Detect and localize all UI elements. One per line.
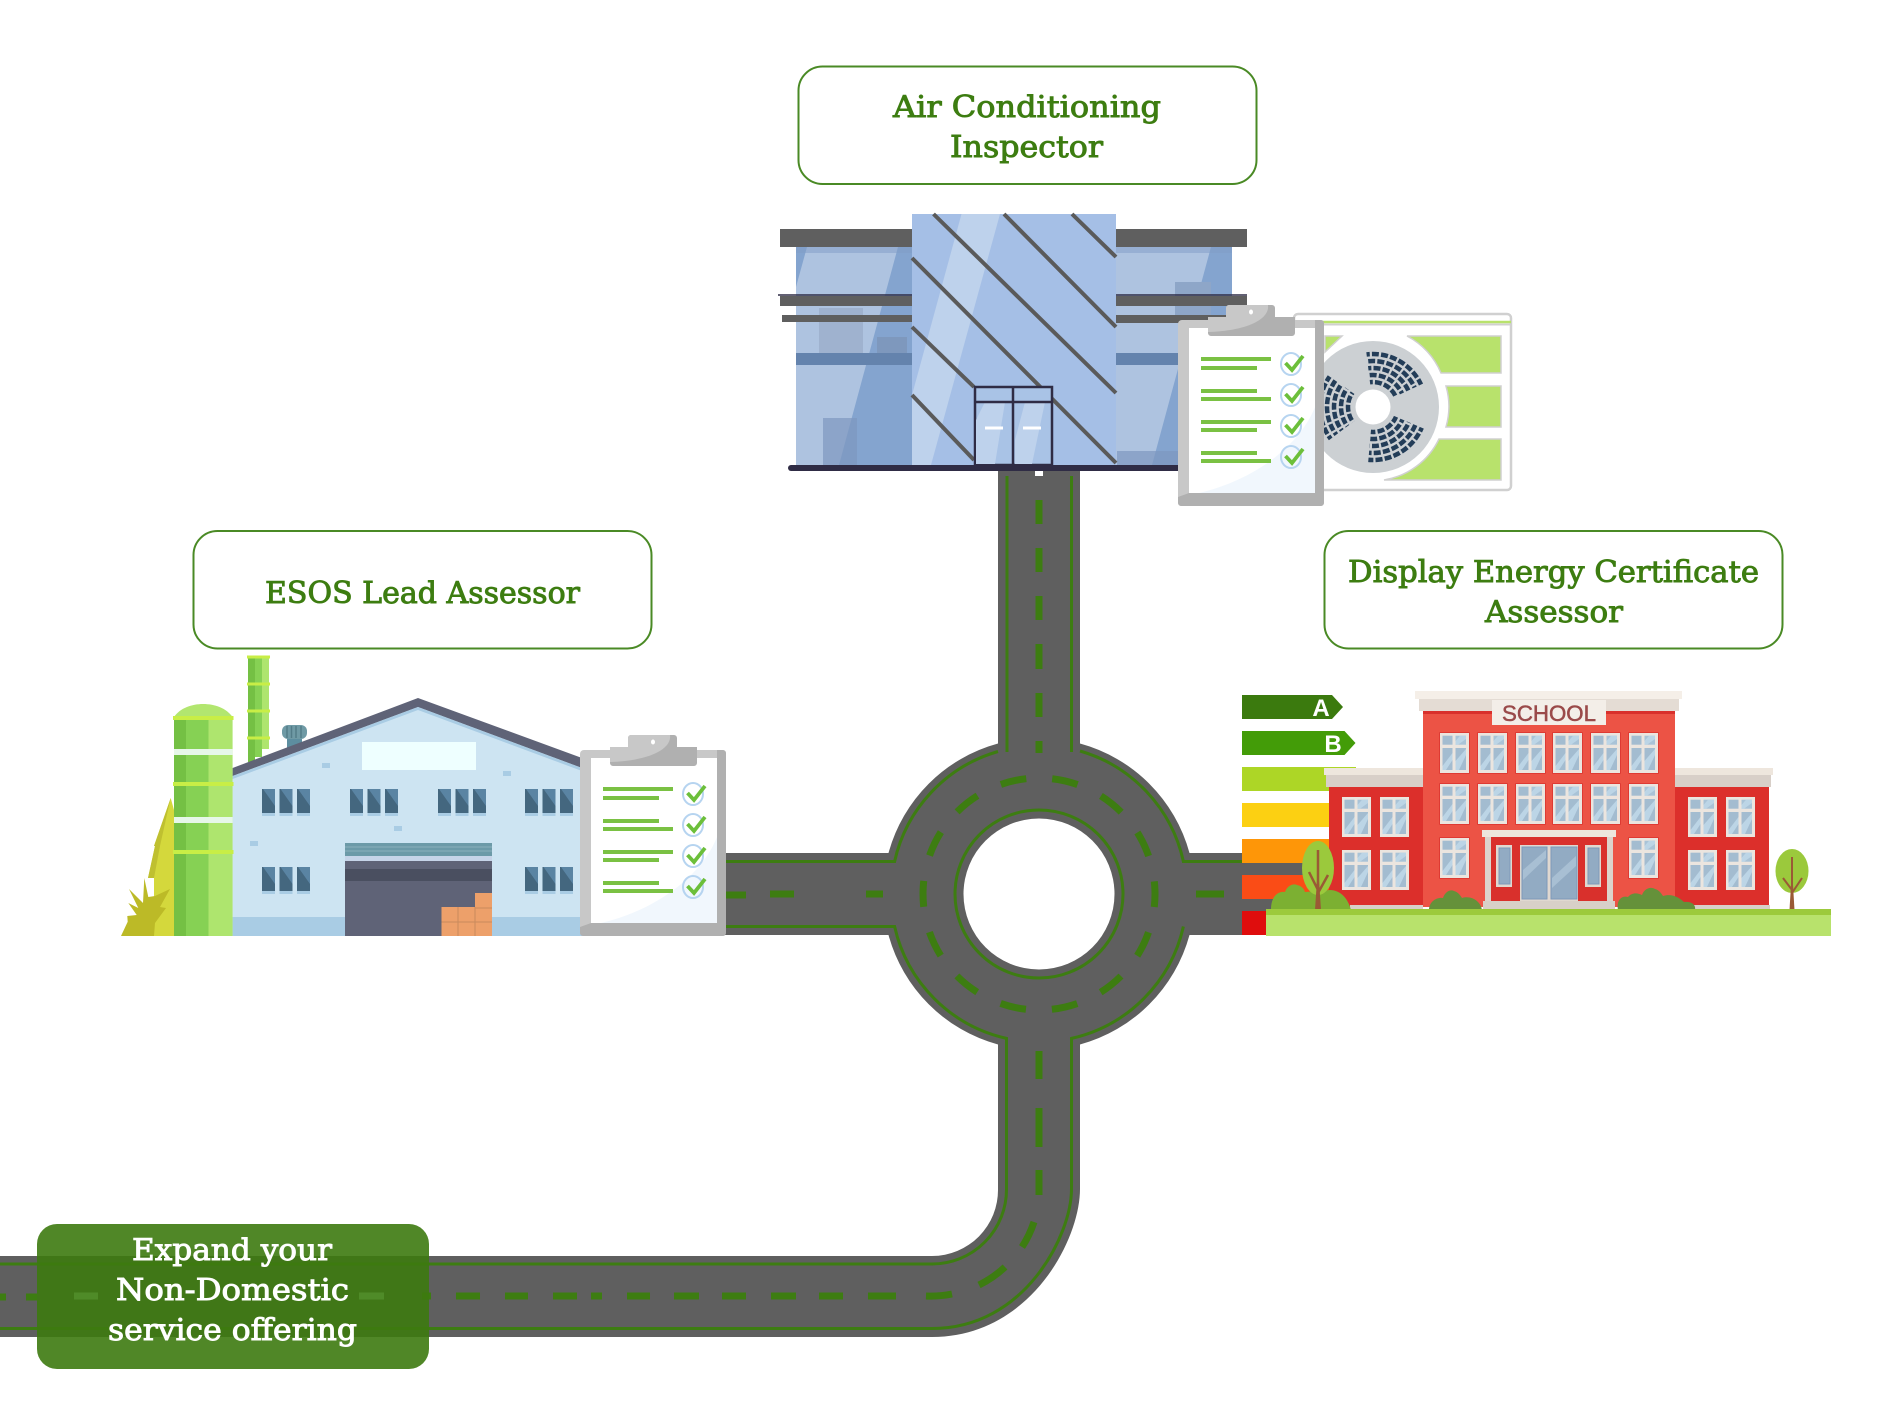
roundabout centre island <box>964 818 1114 970</box>
rating A: A <box>1312 695 1330 722</box>
porch and doors <box>1482 830 1616 909</box>
windows <box>262 789 573 894</box>
energy rating scale <box>1242 695 1356 935</box>
heading box: ESOS Lead Assessor <box>194 531 652 648</box>
school illustration <box>1266 691 1831 936</box>
office building illustration <box>778 214 1247 471</box>
entrance doors <box>975 387 1052 465</box>
inner roundabout edge line <box>955 810 1123 978</box>
left wing <box>796 247 912 465</box>
warehouse roof <box>233 698 582 776</box>
heading box: Air Conditioning Inspector: Air Conditioning <box>892 90 1161 125</box>
rating B <box>1242 731 1356 758</box>
left wing <box>1324 768 1423 907</box>
air conditioning outdoor unit <box>1294 314 1511 490</box>
road centre dashes <box>0 500 1224 1297</box>
chimney <box>247 657 270 762</box>
start label: Expand your Non-Domestic service offering: service offering <box>108 1313 357 1348</box>
rating bars C to G <box>1242 767 1356 791</box>
road edge lines <box>0 476 1340 1328</box>
bushes <box>1271 884 1695 910</box>
clip <box>1208 305 1295 336</box>
clipboard checklist: air conditioning <box>1178 305 1324 506</box>
tree right <box>1776 849 1808 910</box>
check marks <box>683 783 705 898</box>
heading box: ESOS Lead Assessor: ESOS Lead Assessor <box>265 576 581 611</box>
start label: Expand your Non-Domestic service offering: Expand your <box>132 1233 333 1268</box>
factory illustration <box>121 657 583 936</box>
check marks <box>1281 353 1303 468</box>
road surface <box>0 471 1340 1337</box>
fan <box>1324 341 1439 473</box>
lawn <box>1266 909 1831 936</box>
heading box: Air Conditioning Inspector <box>798 66 1256 184</box>
unit panels <box>1325 336 1501 480</box>
heading box: Display Energy Certificate Assessor: Display Energy Certificate <box>1348 555 1759 590</box>
heading box: Display Energy Certificate Assessor: Assessor <box>1484 595 1624 630</box>
clipboard checklist: ESOS <box>580 735 726 936</box>
heading box: Display Energy Certificate Assessor <box>1324 531 1782 648</box>
road network <box>0 471 1340 1337</box>
heading box: Air Conditioning Inspector: Inspector <box>950 130 1104 165</box>
tree left <box>1302 841 1334 910</box>
plinth <box>1350 905 1770 909</box>
rating A <box>1242 695 1343 722</box>
roof slabs and bands <box>780 229 1247 323</box>
windows <box>1341 732 1756 891</box>
cornice <box>1419 699 1679 711</box>
right wing <box>1675 768 1773 907</box>
yellow tree <box>148 798 174 936</box>
checklist lines <box>603 789 673 891</box>
floor slab <box>788 465 1188 471</box>
school sign: SCHOOL <box>1502 701 1596 726</box>
rating B: B <box>1324 731 1342 758</box>
glass tower <box>912 214 1116 465</box>
cardboard boxes <box>442 893 492 936</box>
roundabout lane dashes <box>923 778 1155 1010</box>
checklist lines <box>1201 359 1271 461</box>
loading door <box>345 843 492 936</box>
right wing <box>1116 247 1232 465</box>
sign panel <box>362 742 476 770</box>
centre block <box>1423 711 1675 907</box>
roof vent <box>282 725 307 748</box>
start label: Expand your Non-Domestic service offering <box>37 1224 429 1369</box>
silo <box>173 704 234 936</box>
clip <box>610 735 697 766</box>
start label: Expand your Non-Domestic service offering: Non-Domestic <box>116 1273 349 1308</box>
wall bricks <box>250 763 511 846</box>
warehouse wall <box>233 707 582 936</box>
road end marker <box>1035 471 1043 476</box>
grass tuft <box>121 878 170 936</box>
